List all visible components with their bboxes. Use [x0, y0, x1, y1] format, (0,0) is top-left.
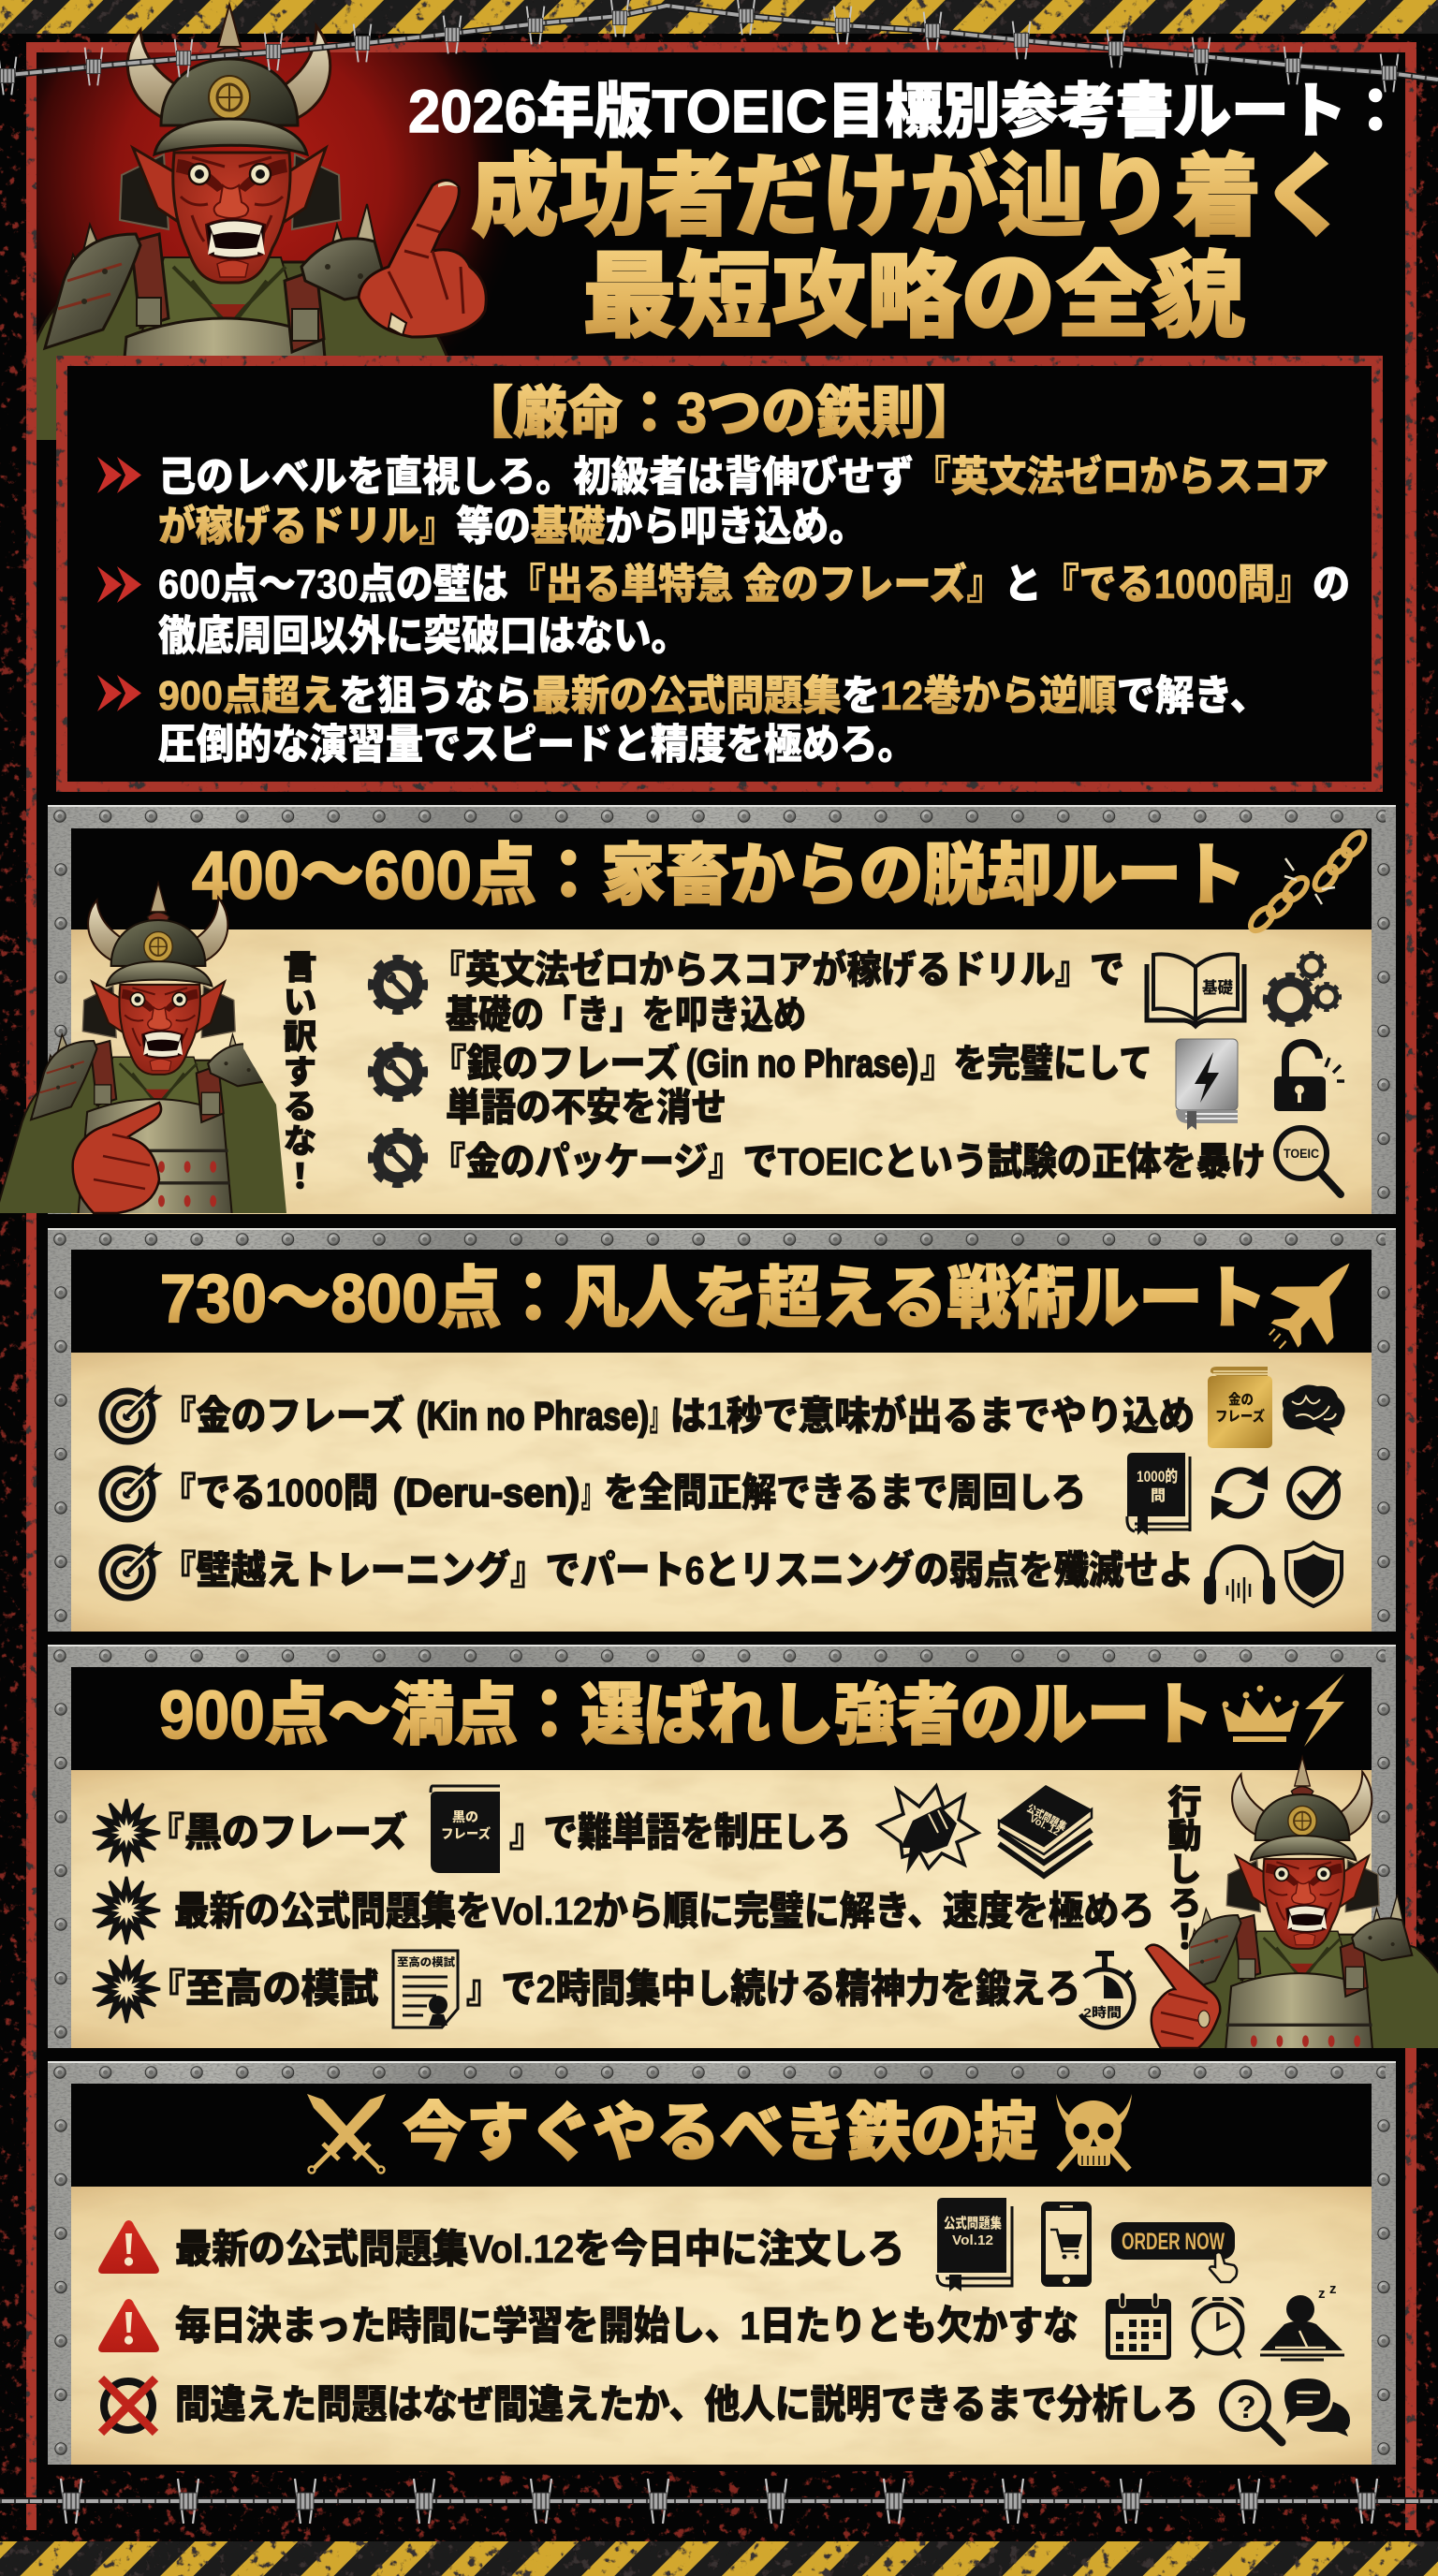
icon: person studying: z: [1329, 2281, 1337, 2297]
item 1: は1秒で意味が出るまでやり込め: [670, 1394, 1195, 1438]
icon: silver book: [1176, 1039, 1238, 1130]
icon: gold book: [1208, 1367, 1272, 1448]
rule 3: [97, 673, 1269, 768]
item 2: (Gin no Phrase): [686, 1042, 918, 1085]
icon: book stack: [999, 1785, 1092, 1876]
hazard stripe bottom: [0, 2541, 1438, 2576]
item 1: 』: [650, 1394, 668, 1438]
icon: calendar: [1106, 2292, 1171, 2360]
hazard stripe top: [0, 0, 1438, 34]
icon: crown: [1223, 1685, 1299, 1742]
item 3: [371, 1128, 1341, 1194]
icon: jet: [1248, 1237, 1378, 1370]
item 1: 』で難単語を制圧しろ: [509, 1810, 851, 1854]
icon: fist burst: [878, 1786, 978, 1874]
icon: stopwatch 2h: [1080, 1954, 1134, 2027]
item 2: 単語の不安を消せ: [446, 1086, 726, 1129]
icon: gears: [1266, 952, 1341, 1024]
item 2: [371, 1039, 1344, 1130]
item 1: [371, 948, 1341, 1036]
icon: shield: [1286, 1543, 1342, 1606]
icon: headphones: [1204, 1547, 1275, 1604]
item 2: 』: [581, 1471, 602, 1515]
item 1: (Kin no Phrase): [417, 1394, 649, 1438]
icon: cycle: [1211, 1466, 1268, 1520]
heading: 900+: 900点〜満点：選ばれし強者のルート: [159, 1678, 1213, 1753]
item 2: 『銀のフレーズ: [431, 1042, 680, 1085]
icon: open book: [1147, 954, 1244, 1026]
rule 1: 己のレベルを直視しろ。初級者は背伸びせず『英文法ゼロからスコア: [158, 453, 1328, 500]
title line 3: 最短攻略の全貌: [582, 244, 1245, 349]
rule 2: 徹底周回以外に突破口はない。: [158, 613, 689, 659]
item 3: 『至高の模試: [147, 1967, 378, 2011]
icon: black phrase book: 黒の: [452, 1809, 478, 1824]
icon: check circle: [1289, 1469, 1339, 1517]
rule 2: [97, 561, 1350, 659]
icon: crossed-out circle: [101, 2378, 155, 2433]
icon: black phrase book: [431, 1786, 500, 1873]
icon: book stack: 公式問題集: [1025, 1801, 1069, 1833]
item 2: 毎日決まった時間に学習を開始し、1日たりとも欠かすな: [175, 2304, 1078, 2348]
oni: excuses: [0, 880, 286, 1215]
icon: stopwatch 2h: 2時間: [1083, 2005, 1122, 2020]
panel: 730-800 route: [37, 1228, 1396, 1632]
rule 2: 600点〜730点の壁は『出る単特急 金のフレーズ』と『でる1000問』の: [158, 561, 1350, 607]
icon: question magnifier: ?: [1237, 2390, 1256, 2425]
item 1: 『英文法ゼロからスコアが稼げるドリル』で: [431, 948, 1124, 991]
icon: crossed swords: [307, 2094, 386, 2174]
item 1: 『黒のフレーズ: [147, 1810, 407, 1854]
rule 1: が稼げるドリル』等の基礎から叩き込め。: [158, 503, 866, 549]
item 3: 間違えた問題はなぜ間違えたか、他人に説明できるまで分析しろ: [175, 2382, 1198, 2426]
title line 1: 2026年版TOEIC目標別参考書ルート：: [408, 78, 1404, 145]
icon: official book: Vol.12: [952, 2232, 993, 2248]
icon: gold book: フレーズ: [1215, 1408, 1265, 1425]
icon: gold book: 金の: [1228, 1392, 1254, 1408]
item 1: 基礎: [1202, 978, 1233, 997]
item 1: 基礎の「き」を叩き込め: [446, 993, 806, 1036]
item 2: [98, 2281, 1344, 2360]
header panel: [37, 1, 1382, 440]
item 1: 『金のフレーズ: [161, 1394, 404, 1438]
heading: 730-800: 730〜800点：凡人を超える戦術ルート: [160, 1262, 1267, 1337]
oni illustration: main, pointing: [37, 1, 488, 440]
icon: magnifier TOEIC: [1276, 1128, 1341, 1194]
title line 2: 成功者だけが辿り着く: [471, 147, 1349, 247]
item 3: [102, 1541, 1342, 1606]
oni: take action: [1144, 1754, 1438, 2050]
item 3: 『壁越えトレーニング』でパート6とリスニングの弱点を殲滅せよ: [161, 1548, 1194, 1592]
icon: brain: [1283, 1384, 1345, 1436]
item 2: 『でる1000問: [161, 1471, 378, 1515]
panel: three iron rules: [56, 356, 1383, 792]
item 1: 最新の公式問題集Vol.12を今日中に注文しろ: [175, 2227, 904, 2271]
icon: magnifier TOEIC: TOEIC: [1284, 1146, 1319, 1161]
vertical shout: 行動しろ！: [1163, 1784, 1202, 1953]
rule 3: 圧倒的な演習量でスピードと精度を極めろ。: [158, 722, 916, 768]
icon: 1000 book: 1000的: [1137, 1467, 1178, 1486]
rule 3: 900点超えを狙うなら最新の公式問題集を12巻から逆順で解き、: [158, 673, 1269, 719]
barbed wire bottom: [0, 2479, 1438, 2524]
rule 1: [97, 453, 1328, 549]
icon: person studying: z: [1318, 2286, 1326, 2302]
icon: lightning: [1304, 1674, 1344, 1747]
icon: question magnifier: [1222, 2382, 1282, 2442]
item 2: [93, 1877, 1154, 1944]
item 2: (Deru-sen): [393, 1471, 580, 1515]
item 2: 最新の公式問題集をVol.12から順に完璧に解き、速度を極めろ: [174, 1889, 1154, 1933]
item 3: [101, 2378, 1350, 2442]
icon: mock test sheet: [393, 1951, 458, 2027]
icon: 1000 book: [1127, 1453, 1190, 1535]
item 2: [102, 1453, 1339, 1535]
panel: iron rules to do now: [37, 2061, 1396, 2465]
icon: skull: [1056, 2094, 1132, 2170]
button: order now: [1111, 2222, 1237, 2282]
icon: broken chain: [1247, 828, 1369, 934]
icon: official book: [937, 2198, 1012, 2291]
icon: mock test sheet: 至高の模試: [397, 1955, 456, 1969]
icon: phone cart: [1041, 2202, 1092, 2287]
item 1: [98, 2198, 1237, 2291]
icon: person studying: [1260, 2281, 1344, 2360]
item 3: [93, 1951, 1134, 2027]
icon: chat bubbles: [1284, 2378, 1350, 2437]
item 1: [102, 1367, 1345, 1448]
vertical shout: 言い訳するな！: [279, 949, 316, 1193]
icon: 1000 book: 問: [1151, 1487, 1166, 1504]
panel: 900+ route: [48, 1645, 1438, 2050]
button: order now: ORDER NOW: [1122, 2229, 1225, 2255]
heading: 400-600: 400〜600点：家畜からの脱却ルート: [192, 839, 1246, 914]
item 3: 』で2時間集中し続ける精神力を鍛えろ: [466, 1967, 1080, 2011]
panel: 400-600 route: [0, 805, 1396, 1222]
heading: do now: 今すぐやるべき鉄の掟: [403, 2098, 1037, 2169]
icon: official book: 公式問題集: [944, 2215, 1002, 2232]
item 1: [93, 1785, 1092, 1876]
heading: three iron rules: 【厳命：3つの鉄則】: [459, 382, 979, 445]
icon: black phrase book: フレーズ: [441, 1826, 491, 1841]
item 3: 『金のパッケージ』でTOEICという試験の正体を暴け: [431, 1140, 1266, 1183]
icon: open lock: [1274, 1043, 1344, 1111]
item 2: を全問正解できるまで周回しろ: [604, 1471, 1086, 1515]
barbed wire top: [0, 0, 1438, 95]
icon: book stack: Vol. 12: [1028, 1813, 1062, 1838]
icon: alarm clock: [1192, 2297, 1244, 2358]
item 2: 』を完璧にして: [920, 1042, 1152, 1085]
